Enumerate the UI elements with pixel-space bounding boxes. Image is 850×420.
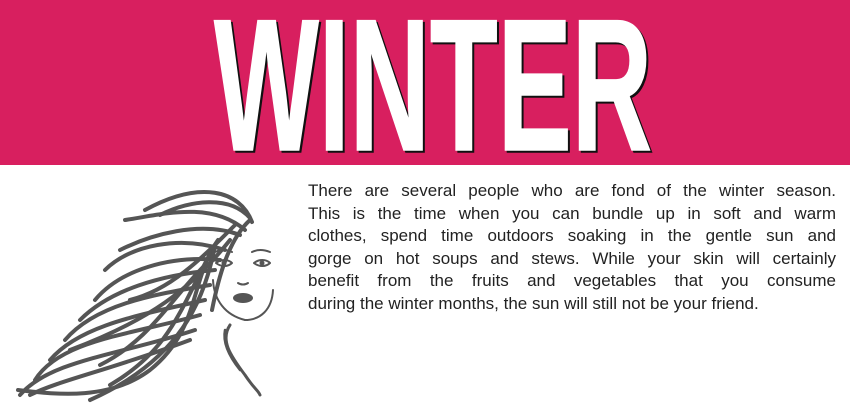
text block: description: benefit from the fruits and vegetables that you consume [308,271,836,290]
text block: description: during the winter months, the sun will still not be your friend. [308,294,759,313]
text block: description: There are several people who are fond of the winter season. [308,181,836,200]
illustration: woman with flowing hair [16,190,274,402]
text block: description: This is the time when you can bundle up in soft and warm [308,204,836,223]
title: WINTER [214,0,654,165]
text block: description: gorge on hot soups and stews. While your skin will certainly [308,249,836,268]
text block: description [308,181,836,313]
title band [0,0,850,165]
text block: description: clothes, spend time outdoors soaking in the gentle sun and [308,226,836,245]
face [213,250,273,395]
